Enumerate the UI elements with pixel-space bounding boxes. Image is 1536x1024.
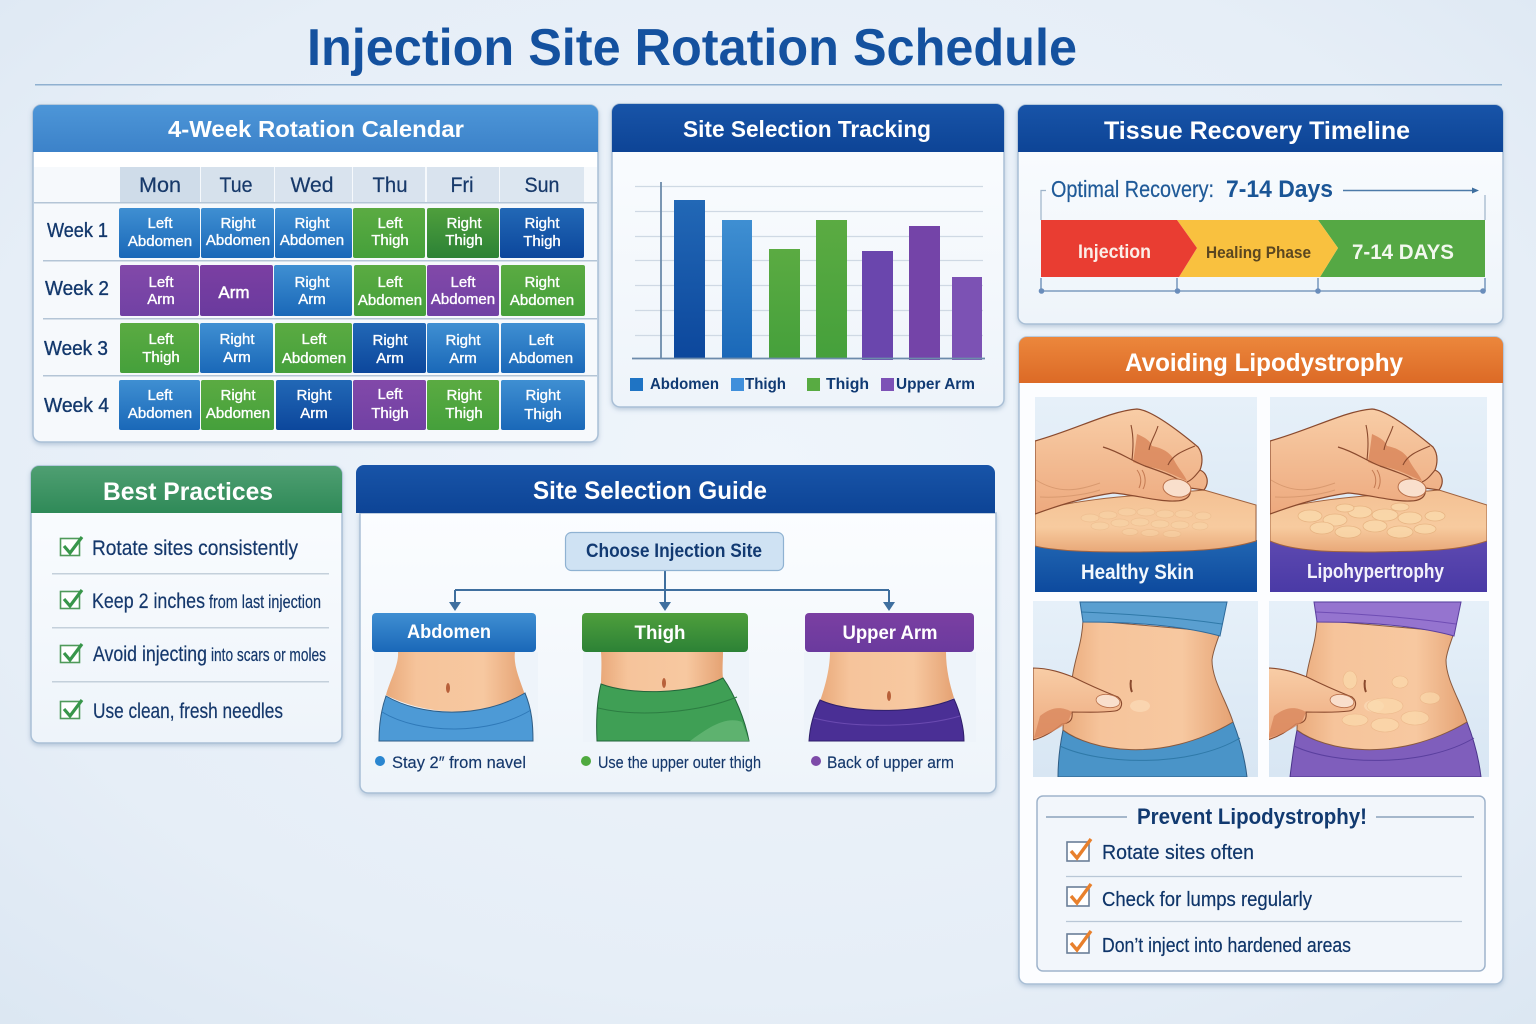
stage: red injection: [1041, 220, 1197, 277]
practice: avoid scars: [60, 643, 326, 666]
cell: week 2 friday: Abdomen: [431, 291, 495, 308]
cell: week 1 sunday: Thigh: [523, 233, 561, 250]
cell: week 2 wednesday: Arm: [298, 291, 326, 308]
cell: week 3 wednesday: [275, 323, 352, 373]
upper arm label: [805, 613, 974, 652]
calendar heading: 4-Week Rotation Calendar: [168, 116, 464, 142]
cell: week 1 thursday: [353, 208, 425, 258]
thigh label: Thigh: [634, 623, 686, 644]
cell: week 4 wednesday: [276, 380, 352, 430]
cell: week 3 thursday: Arm: [376, 350, 404, 367]
cell: week 3 wednesday: Abdomen: [282, 350, 346, 367]
guide heading: [356, 465, 995, 513]
abdomen tip: Stay 2″ from navel: [392, 753, 526, 772]
cell: week 3 friday: Arm: [449, 350, 477, 367]
cell: week 2 monday: Arm: [147, 291, 175, 308]
cell: week 3 sunday: Left: [528, 332, 554, 349]
stage: green 7-14 days: 7-14 DAYS: [1352, 241, 1454, 264]
image: healthy skin: [1035, 397, 1257, 592]
item: avoid hardened areas: Don’t inject into hardened areas: [1102, 935, 1351, 957]
cell: week 4 friday: [427, 380, 499, 430]
cell: week 3 friday: Right: [445, 332, 481, 349]
chart legend: Abdomen: [650, 376, 719, 393]
choose site box: [566, 532, 784, 570]
cell: week 2 friday: Left: [450, 274, 476, 291]
practice: keep distance: from last injection: [209, 592, 321, 612]
upper arm label: Upper Arm: [842, 623, 938, 644]
practice: clean needles: Use clean, fresh needles: [93, 700, 283, 723]
cell: week 4 thursday: Thigh: [371, 405, 409, 422]
chart legend: Thigh: [826, 376, 869, 393]
optimal recovery label: Optimal Recovery:: [1051, 176, 1214, 202]
cell: week 1 sunday: Right: [524, 215, 560, 232]
callout: prevent lipodystrophy: Prevent Lipodystrophy!: [1137, 804, 1367, 829]
cell: week 1 tuesday: Abdomen: [206, 232, 270, 249]
panel: site selection tracking: [612, 104, 1004, 407]
cell: week 1 sunday: [500, 208, 584, 258]
stage: yellow healing phase: Healing Phase: [1206, 243, 1311, 262]
cell: week 1 thursday: Thigh: [371, 232, 409, 249]
cell: week 2 tuesday: [200, 265, 273, 316]
chart legend: Upper Arm: [896, 376, 975, 393]
panel: 4-week rotation calendar: [33, 105, 598, 442]
row: week 2: Week 2: [45, 278, 109, 300]
image: lipohypertrophy abdomen: [1267, 601, 1489, 777]
cell: week 3 wednesday: Left: [301, 331, 327, 348]
row: week 4: [44, 380, 585, 430]
cell: week 2 wednesday: [274, 265, 352, 316]
cell: week 4 sunday: [501, 380, 585, 430]
best practices heading: [31, 466, 342, 513]
weekday header row: Fri: [450, 174, 474, 197]
calendar heading: [33, 105, 598, 152]
row: week 2: [45, 265, 585, 316]
cell: week 2 thursday: Abdomen: [358, 292, 422, 309]
chart legend: [630, 376, 975, 393]
cell: week 2 monday: Left: [148, 274, 174, 291]
cell: week 1 thursday: Left: [377, 215, 403, 232]
best practices heading: Best Practices: [103, 478, 273, 506]
image: healthy abdomen: [1033, 601, 1258, 777]
cell: week 1 wednesday: Right: [294, 215, 330, 232]
timeline bar: [1041, 220, 1485, 277]
tracking heading: [612, 104, 1004, 152]
cell: week 1 friday: Thigh: [445, 232, 483, 249]
cell: week 3 friday: [427, 323, 499, 373]
timeline scale: [1039, 278, 1486, 294]
cell: week 4 wednesday: Arm: [300, 405, 328, 422]
cell: week 4 tuesday: Right: [220, 387, 256, 404]
option: upper arm: [804, 613, 976, 772]
lipodystrophy heading: [1019, 337, 1503, 383]
panel: avoiding lipodystrophy: [1019, 337, 1503, 984]
weekday header row: Mon: [139, 174, 181, 197]
illustration: abdomen torso: [379, 652, 533, 741]
cell: week 4 sunday: Thigh: [524, 406, 562, 423]
cell: week 2 wednesday: Right: [294, 274, 330, 291]
practice: avoid scars: into scars or moles: [211, 645, 326, 665]
panel: best practices: [31, 466, 342, 743]
cell: week 4 tuesday: [201, 380, 274, 430]
upper arm tip: Back of upper arm: [827, 753, 954, 772]
cell: week 3 monday: Thigh: [142, 349, 180, 366]
image: lipohypertrophy: [1270, 397, 1487, 592]
cell: week 2 thursday: [354, 265, 426, 316]
panel: tissue recovery timeline: [1018, 105, 1503, 324]
item: rotate often: Rotate sites often: [1102, 842, 1254, 864]
practice: keep distance: Keep 2 inches: [92, 590, 205, 613]
arrows: decision flow: [449, 560, 895, 611]
cell: week 2 sunday: Abdomen: [510, 292, 574, 309]
cell: week 2 thursday: Left: [377, 274, 403, 291]
cell: week 1 friday: Right: [446, 215, 482, 232]
item: check lumps: Check for lumps regularly: [1102, 889, 1312, 911]
thigh label: [582, 613, 748, 652]
tracking heading: Site Selection Tracking: [683, 116, 931, 142]
stage: red injection: Injection: [1078, 242, 1151, 263]
weekday header row: [120, 167, 584, 202]
cell: week 1 friday: [427, 208, 499, 258]
cell: week 4 tuesday: Abdomen: [206, 405, 270, 422]
cell: week 3 tuesday: Arm: [223, 349, 251, 366]
option: abdomen: [372, 613, 538, 772]
cell: week 2 tuesday: Arm: [218, 283, 250, 302]
cell: week 3 sunday: [501, 323, 585, 373]
practice: rotate sites: Rotate sites consistently: [92, 537, 298, 560]
cell: week 2 sunday: [501, 265, 585, 316]
cell: week 2 friday: [427, 265, 499, 316]
row: week 1: [47, 208, 584, 258]
cell: week 2 sunday: Right: [524, 274, 560, 291]
cell: week 3 tuesday: Right: [219, 331, 255, 348]
row: week 4: Week 4: [44, 395, 109, 417]
cell: week 4 wednesday: Right: [296, 387, 332, 404]
cell: week 1 monday: Abdomen: [128, 233, 192, 250]
cell: week 4 sunday: Right: [525, 387, 561, 404]
weekday header row: Thu: [372, 174, 408, 197]
cell: week 3 thursday: Right: [372, 332, 408, 349]
cell: week 1 wednesday: Abdomen: [280, 232, 344, 249]
title: Injection Site Rotation Schedule: [307, 19, 1077, 77]
callout: prevent lipodystrophy: [1037, 796, 1485, 971]
tissue heading: [1018, 105, 1503, 152]
cell: week 1 tuesday: Right: [220, 215, 256, 232]
cell: week 1 monday: Left: [147, 215, 173, 232]
row: week 3: [44, 323, 585, 373]
cell: week 3 sunday: Abdomen: [509, 350, 573, 367]
choose site box: Choose Injection Site: [586, 541, 762, 562]
item: check lumps: [1067, 884, 1312, 911]
illustration: upper arm torso: [809, 652, 964, 741]
weekday header row: Tue: [220, 174, 252, 197]
weekday header row: Wed: [290, 174, 334, 197]
lipodystrophy heading: Avoiding Lipodystrophy: [1125, 349, 1403, 377]
cell: week 1 tuesday: [201, 208, 274, 258]
cell: week 4 monday: [119, 380, 200, 430]
optimal recovery label: 7-14 Days: [1226, 176, 1333, 203]
practice: keep distance: [60, 590, 321, 613]
guide heading: Site Selection Guide: [533, 477, 767, 505]
arrow: recovery span: [1041, 188, 1485, 220]
abdomen label: Abdomen: [407, 622, 491, 643]
cell: week 4 thursday: Left: [377, 386, 403, 403]
cell: week 3 monday: Left: [148, 331, 174, 348]
image: healthy skin: Healthy Skin: [1081, 561, 1194, 584]
cell: week 4 monday: Left: [147, 387, 173, 404]
illustration: thigh torso: [597, 652, 749, 741]
cell: week 4 thursday: [353, 380, 426, 430]
row: week 1: Week 1: [47, 220, 108, 242]
cell: week 3 tuesday: [200, 323, 273, 373]
thigh tip: Use the upper outer thigh: [598, 753, 761, 772]
optimal recovery label: [1051, 176, 1333, 203]
cell: week 4 friday: Right: [446, 387, 482, 404]
option: thigh: [581, 613, 761, 772]
stage: yellow healing phase: [1177, 220, 1338, 277]
practice: avoid scars: Avoid injecting: [93, 643, 207, 666]
tissue heading: Tissue Recovery Timeline: [1104, 117, 1410, 145]
chart legend: Thigh: [745, 376, 786, 393]
cell: week 1 monday: [119, 208, 200, 258]
item: avoid hardened areas: [1067, 931, 1351, 957]
cell: week 4 monday: Abdomen: [128, 405, 192, 422]
bar chart: [632, 182, 985, 360]
cell: week 4 friday: Thigh: [445, 405, 483, 422]
cell: week 2 monday: [120, 265, 199, 316]
cell: week 3 monday: [120, 323, 199, 373]
panel: site selection guide: [356, 465, 996, 793]
cell: week 1 wednesday: [275, 208, 352, 258]
weekday header row: Sun: [524, 174, 560, 197]
row: week 3: Week 3: [44, 338, 108, 360]
image: lipohypertrophy: Lipohypertrophy: [1307, 561, 1445, 583]
cell: week 3 thursday: [353, 323, 426, 373]
abdomen label: [372, 613, 536, 652]
stage: green 7-14 days: [1318, 220, 1485, 277]
